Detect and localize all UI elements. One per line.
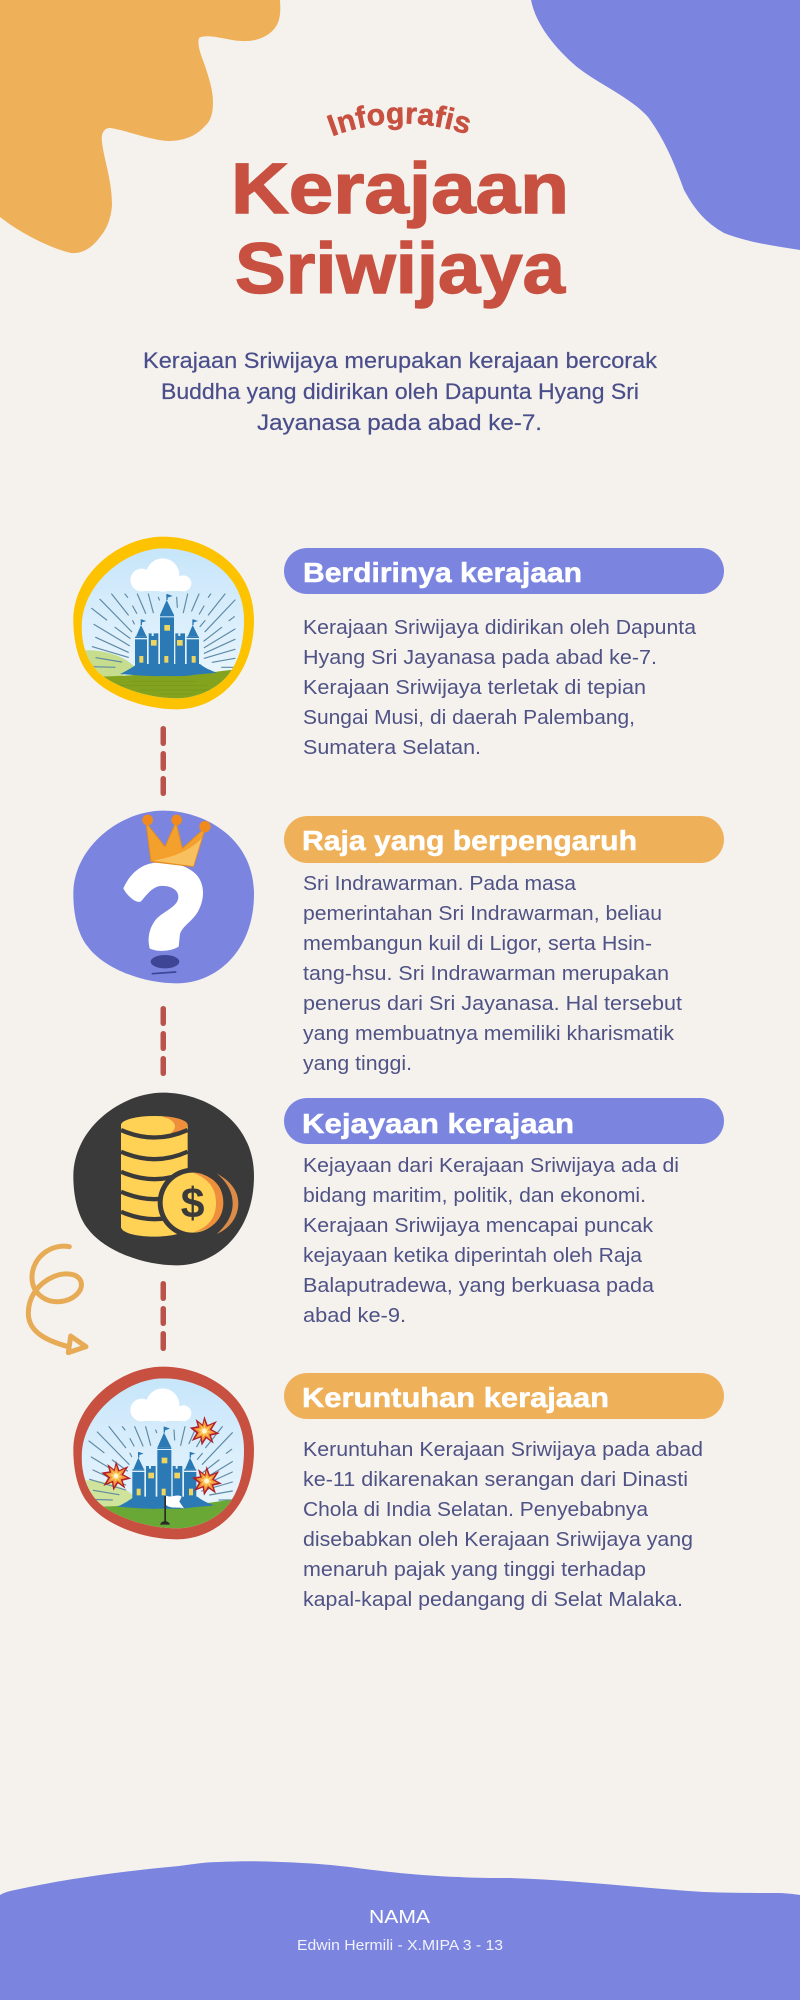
heading text: Kejayaan kerajaan [302,1108,574,1139]
body text: Kerajaan Sriwijaya mencapai puncak [303,1215,654,1237]
section 1: Berdirinya kerajaan [284,548,724,759]
footer panel [0,1861,800,2000]
icon: stack of coins: $ [181,1179,205,1227]
body text: pemerintahan Sri Indrawarman, beliau [303,903,662,925]
section 4: Keruntuhan kerajaan [284,1373,724,1611]
body text: Sumatera Selatan. [303,737,481,759]
icon: question mark with crown [73,811,254,983]
orange blob top left [0,0,280,253]
arrow: curly orange arrow [28,1246,86,1353]
body text: ke-11 dikarenakan serangan dari Dinasti [303,1469,688,1491]
body text [303,873,682,1075]
body text: disebabkan oleh Kerajaan Sriwijaya yang [303,1529,693,1551]
title: Sriwijaya [235,230,566,309]
intro paragraph [143,348,658,435]
body text [303,1155,679,1327]
heading pill [284,1373,724,1419]
body text: Kerajaan Sriwijaya terletak di tepian [303,677,646,699]
footer name label: NAMA [369,1907,430,1927]
body text: Keruntuhan Kerajaan Sriwijaya pada abad [303,1439,703,1461]
dashed connector 1 [160,726,166,796]
heading pill [284,1098,724,1144]
section 2: Raja yang berpengaruh [284,816,724,1075]
body text [303,617,697,759]
blue blob top right [531,0,800,250]
intro paragraph: Kerajaan Sriwijaya merupakan kerajaan bercorak [143,348,658,373]
dashed connector 2 [160,1006,166,1076]
body text: kapal-kapal pedangang di Selat Malaka. [303,1589,683,1611]
body text: bidang maritim, politik, dan ekonomi. [303,1185,646,1207]
heading pill [284,816,724,863]
body text: Balaputradewa, yang berkuasa pada [303,1275,655,1297]
intro paragraph: Jayanasa pada abad ke-7. [257,410,542,435]
heading text: Keruntuhan kerajaan [302,1382,609,1413]
footer wave [0,1861,800,2000]
body text: abad ke-9. [303,1305,406,1327]
body text: kejayaan ketika diperintah oleh Raja [303,1245,643,1267]
body text: penerus dari Sri Jayanasa. Hal tersebut [303,993,682,1015]
header: Infografis label: Infografis [326,105,470,136]
body text: menaruh pajak yang tinggi terhadap [303,1559,646,1581]
body text: Chola di India Selatan. Penyebabnya [303,1499,649,1521]
body text: yang membuatnya memiliki kharismatik [303,1023,675,1045]
body text: Sri Indrawarman. Pada masa [303,873,577,895]
heading text: Berdirinya kerajaan [303,557,582,588]
title: Kerajaan [231,150,569,229]
intro paragraph: Buddha yang didirikan oleh Dapunta Hyang Sri [161,379,639,404]
footer name value: Edwin Hermili - X.MIPA 3 - 13 [297,1937,503,1954]
body text: Kerajaan Sriwijaya didirikan oleh Dapunta [303,617,697,639]
body text: Hyang Sri Jayanasa pada abad ke-7. [303,647,657,669]
title [231,150,569,309]
dashed connector 3 [160,1281,166,1351]
body text: membangun kuil di Ligor, serta Hsin- [303,933,652,955]
body text: Kejayaan dari Kerajaan Sriwijaya ada di [303,1155,679,1177]
body text: yang tinggi. [303,1053,412,1075]
body text [303,1439,703,1611]
heading text: Raja yang berpengaruh [302,825,637,856]
icon: stack of coins [73,1093,254,1265]
heading pill [284,548,724,594]
section 3: Kejayaan kerajaan [284,1098,724,1327]
body text: Sungai Musi, di daerah Palembang, [303,707,635,729]
icon: castle under attack in red ring [73,1367,254,1539]
body text: tang-hsu. Sri Indrawarman merupakan [303,963,669,985]
icon: castle in yellow ring [73,537,254,709]
